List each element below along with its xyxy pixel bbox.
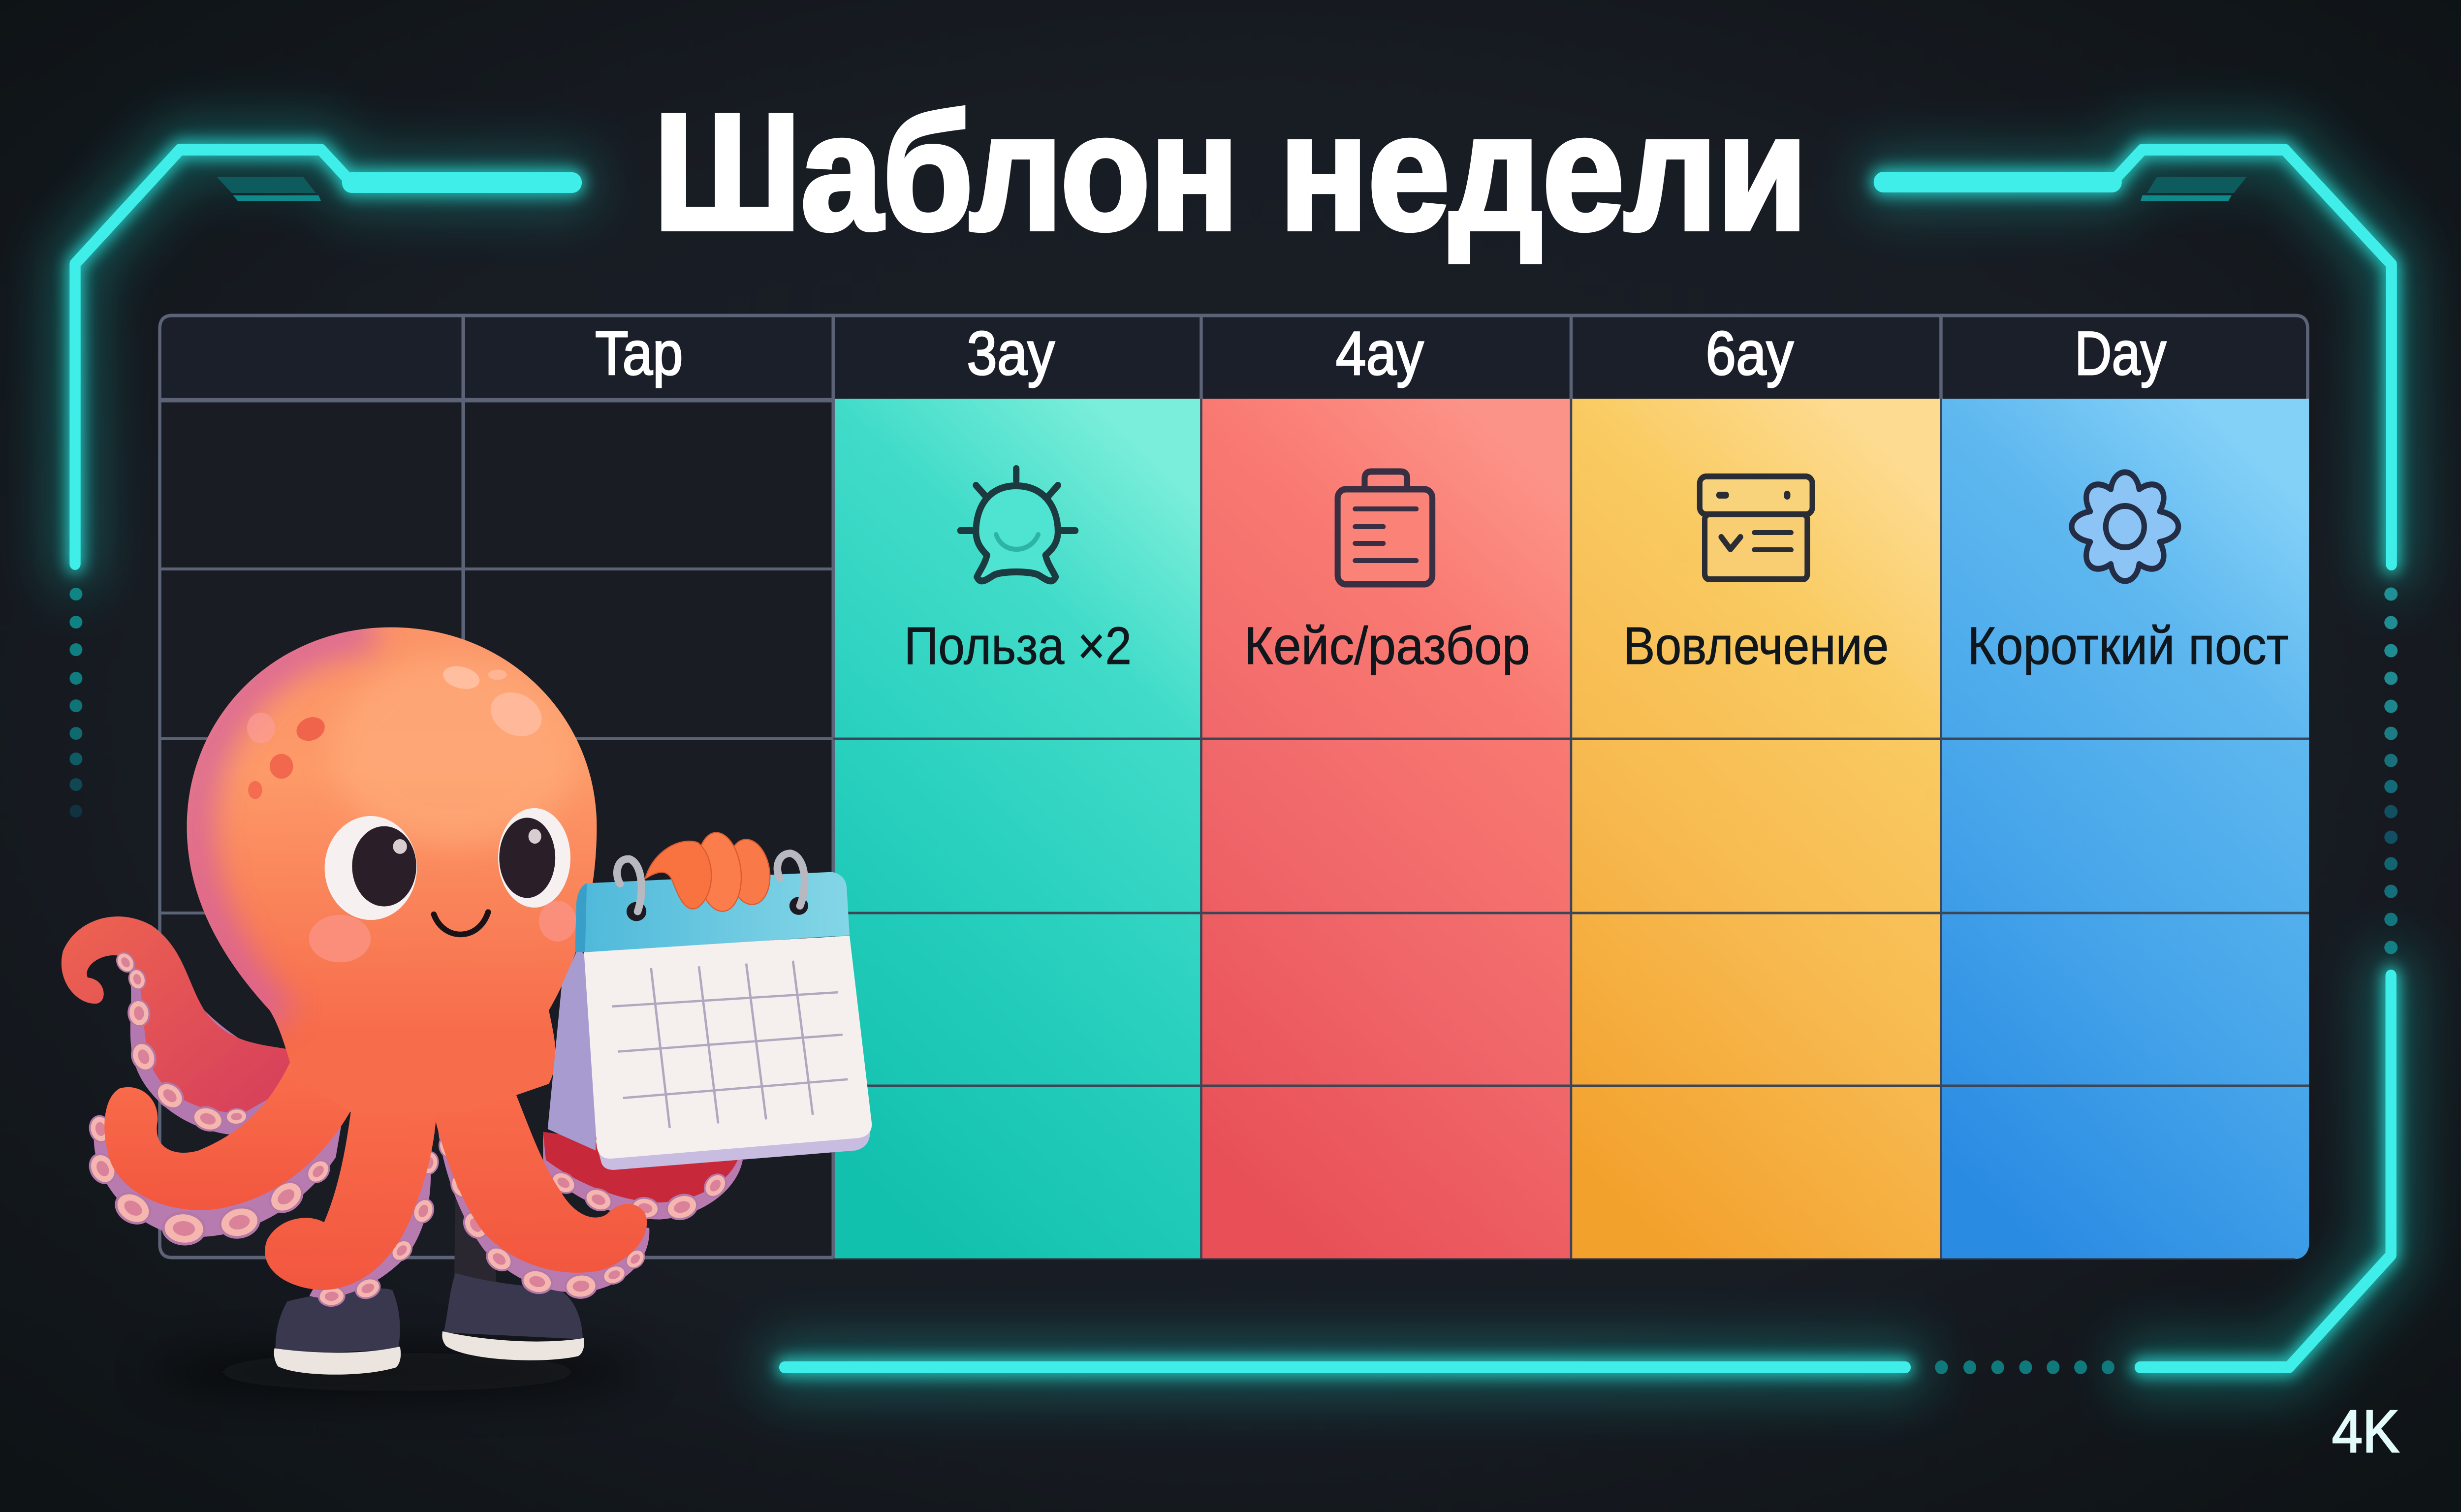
head rim shading (192, 632, 578, 1022)
calendar page (584, 936, 872, 1159)
tentacle fingers (645, 830, 774, 914)
cheek: right (539, 901, 576, 942)
table header row (835, 399, 2309, 1259)
table: weekly template (158, 314, 2310, 1260)
dots: right column (2384, 588, 2398, 954)
header labels (595, 319, 2167, 388)
binder ring: right (777, 853, 808, 915)
cell labels: Короткий пост (1967, 617, 2289, 676)
cell labels: Вовлечение (1623, 617, 1889, 676)
mouth (434, 912, 488, 934)
accent bars: top left (217, 177, 321, 201)
shoe: right (442, 1273, 584, 1360)
neon corner: top right (1883, 150, 2392, 565)
shoe: left (274, 1288, 401, 1375)
neon frame (75, 150, 2392, 1367)
grid lines: dark area (158, 314, 2307, 1259)
arm: back right (543, 1132, 743, 1225)
accent bars: top right (2141, 177, 2247, 201)
head and body (187, 627, 597, 1112)
neon line: bottom (785, 1361, 1905, 1373)
trouser leg (454, 1197, 496, 1282)
cell labels: Кейс/разбор (1244, 617, 1530, 676)
calendar page edge (596, 1132, 870, 1170)
header labels: 4ay (1336, 319, 1424, 388)
eye: left (325, 816, 417, 920)
eye: right (498, 808, 570, 908)
column: yellow (1571, 399, 1941, 1260)
grid lines: coloured area (833, 399, 2309, 1259)
badge: 4K: 4K (2332, 1397, 2399, 1465)
dots: bottom row (1935, 1360, 2114, 1374)
header labels: 6ay (1705, 319, 1794, 388)
column: red (1201, 399, 1571, 1260)
calendar header (575, 872, 850, 952)
dots: left column (69, 588, 82, 818)
icon: clipboard (1338, 472, 1432, 584)
title: Шаблон недели (654, 80, 1807, 264)
header labels: 3ay (967, 319, 1055, 388)
cheek: left (309, 915, 371, 962)
ground shadow (152, 1352, 642, 1392)
cell labels (904, 617, 2289, 676)
header labels: Tap (595, 319, 683, 388)
arm: front centre (265, 1067, 441, 1308)
icon: flower gear (2072, 472, 2178, 581)
icon: box with checklist (1700, 476, 1812, 579)
legs and shoes (274, 1197, 584, 1375)
neon corner: bottom right (2140, 976, 2391, 1367)
calendar grid (612, 961, 848, 1128)
head spots (247, 662, 550, 799)
icon: light bulb (960, 469, 1075, 581)
column: teal (833, 399, 1201, 1260)
arm: raised left (62, 916, 295, 1135)
neon corner: top left (75, 150, 572, 564)
cell labels: Польза ×2 (904, 617, 1132, 676)
header labels: Day (2075, 319, 2167, 388)
arm: front right (426, 1061, 649, 1300)
column: blue (1941, 399, 2310, 1260)
binder ring: left (617, 859, 646, 921)
calendar back stand (548, 948, 601, 1151)
octopus mascot holding calendar (62, 627, 872, 1392)
arm: front left (84, 1058, 356, 1247)
calendar (548, 830, 872, 1170)
